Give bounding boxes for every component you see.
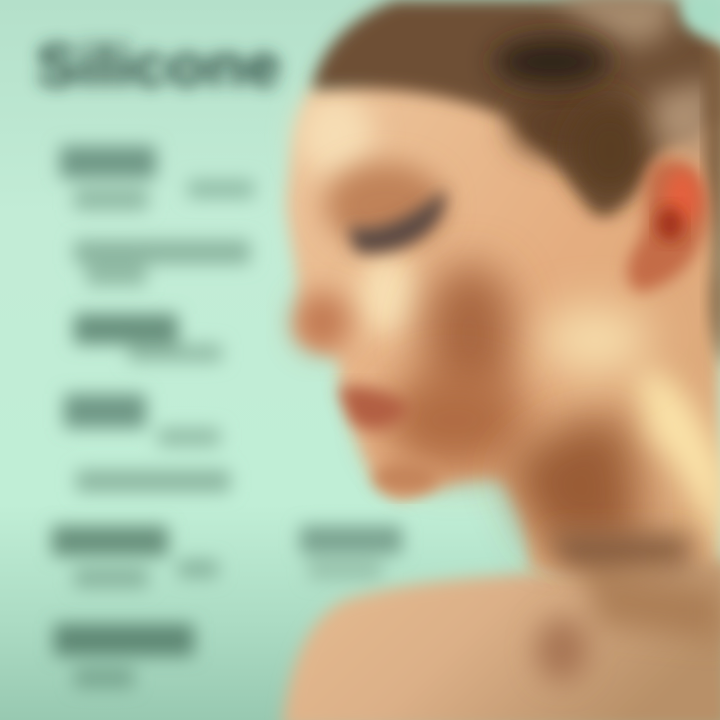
text column xyxy=(52,146,402,688)
hair dark band xyxy=(494,38,610,86)
chin shade xyxy=(373,462,437,494)
hair shade behind ear xyxy=(572,104,648,196)
pendant xyxy=(536,618,588,682)
neck light xyxy=(635,370,720,560)
item 1 xyxy=(60,146,254,210)
skin highlights and shadows xyxy=(294,93,720,560)
collarbone xyxy=(536,535,720,682)
cheek highlight xyxy=(358,255,418,335)
item 6 xyxy=(54,624,194,688)
corner mint xyxy=(682,0,720,34)
lips xyxy=(338,386,410,430)
ear xyxy=(628,159,708,292)
temple hair fade xyxy=(650,80,714,175)
head and neck xyxy=(286,40,720,640)
chest shade xyxy=(580,565,720,640)
jaw light xyxy=(540,306,650,374)
ear core xyxy=(657,207,683,241)
ear red xyxy=(665,170,699,226)
eye socket shadow xyxy=(325,163,445,247)
hair xyxy=(312,0,720,216)
item 5 xyxy=(52,526,218,588)
cheek blush xyxy=(424,263,516,407)
hair at nape xyxy=(706,50,720,370)
nose shadow xyxy=(294,292,350,352)
item 4 xyxy=(64,394,230,492)
ear outer xyxy=(628,159,708,292)
item 3 xyxy=(74,314,222,362)
collar band xyxy=(550,535,692,565)
item 2 xyxy=(74,240,250,286)
hair highlight xyxy=(555,0,675,46)
hair shade under band xyxy=(510,90,630,160)
eye xyxy=(348,190,445,253)
title: Silicone xyxy=(36,32,281,99)
middle label xyxy=(300,526,402,580)
shoulder xyxy=(282,560,720,720)
forehead light xyxy=(297,93,373,177)
lower face shadow xyxy=(383,370,527,470)
neck shadow xyxy=(505,417,640,545)
